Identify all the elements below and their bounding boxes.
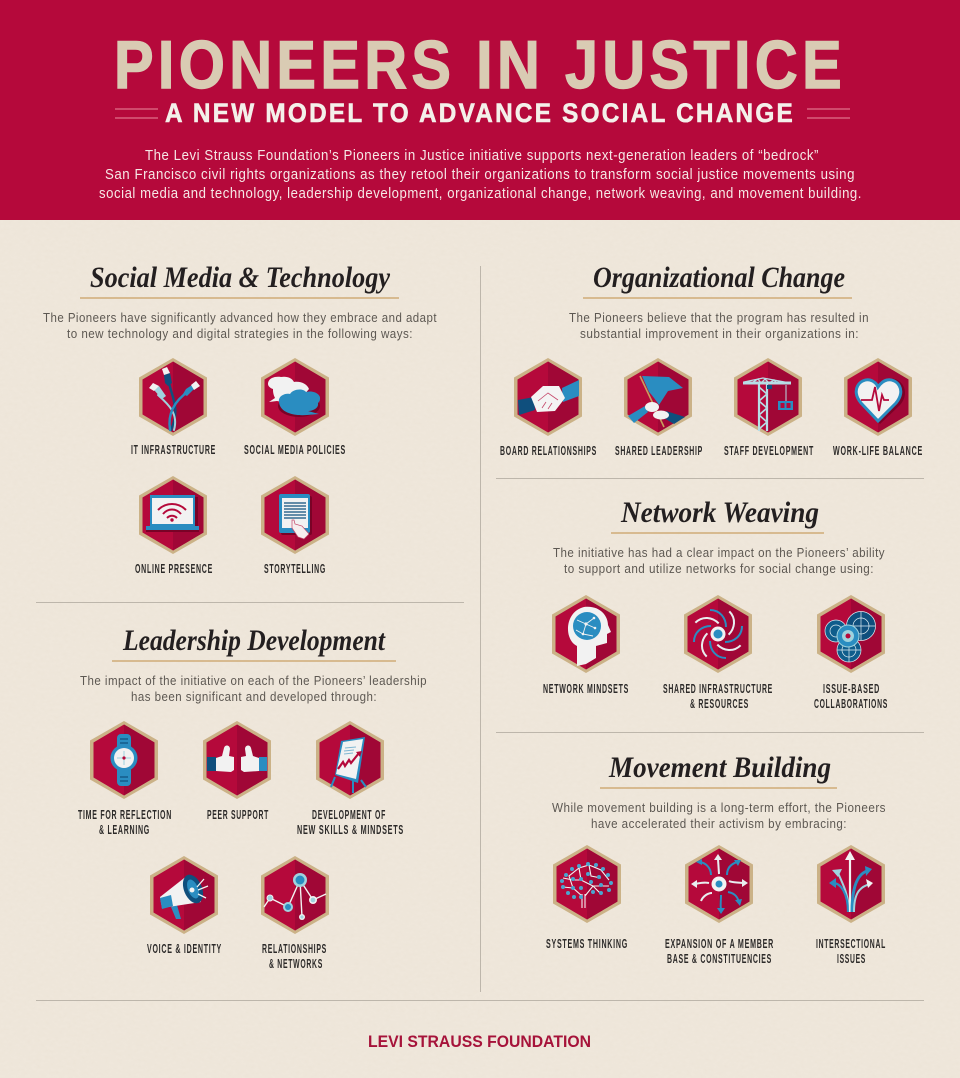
label: shared infrastructure and resources [663, 682, 773, 711]
label: staff development: STAFF DEVELOPMENT [724, 444, 814, 458]
icon: swirl of arrows [684, 595, 752, 673]
label: intersectional issues [816, 937, 886, 966]
label: relationships and networks: & NETWORKS [269, 957, 323, 971]
label: board relationships: BOARD RELATIONSHIPS [500, 444, 597, 458]
intro text: The Levi Strauss Foundation’s Pioneers in Justice initiative supports next-generation leaders of “bedrock” [145, 148, 819, 164]
description: While movement building is a long-term effort, the Pioneers [552, 801, 886, 815]
label: relationships and networks [262, 942, 327, 971]
label: shared leadership: SHARED LEADERSHIP [615, 444, 703, 458]
label: intersectional issues: INTERSECTIONAL [816, 937, 886, 951]
panel: leadership development [78, 624, 427, 971]
description [553, 546, 885, 576]
description: The Pioneers have significantly advanced how they embrace and adapt [43, 311, 437, 325]
label: social media policies: SOCIAL MEDIA POLICIES [244, 443, 346, 457]
label: time for reflection and learning: TIME FOR REFLECTION [78, 808, 172, 822]
description: The initiative has had a clear impact on the Pioneers’ ability [553, 546, 885, 560]
label: shared infrastructure and resources: SHARED INFRASTRUCTURE [663, 682, 773, 696]
icon: megaphone [150, 856, 218, 934]
description: substantial improvement in their organizations in: [580, 327, 859, 341]
panel: network weaving [543, 496, 888, 711]
icon: wristwatch [90, 721, 158, 799]
description [80, 674, 427, 704]
panel: social media and technology [43, 261, 437, 576]
icon: diverging arrows [817, 845, 885, 923]
label: expansion of a member base and constituencies [665, 937, 774, 966]
heading: leadership development: Leadership Development [122, 624, 386, 657]
icon: flip chart [316, 721, 384, 799]
icon: construction crane [734, 358, 802, 436]
description: have accelerated their activism by embracing: [591, 817, 847, 831]
intro text: San Francisco civil rights organizations as they retool their organizations to transform social justice movements using [105, 167, 855, 183]
label: shared infrastructure and resources: & RESOURCES [690, 697, 749, 711]
label: network mindsets: NETWORK MINDSETS [543, 682, 629, 696]
label: development of new skills and mindsets: NEW SKILLS & MINDSETS [297, 823, 404, 837]
description [43, 311, 437, 341]
intro text [99, 148, 862, 202]
label: online presence: ONLINE PRESENCE [135, 562, 213, 576]
icon: thumbs up [203, 721, 271, 799]
description: The Pioneers believe that the program has resulted in [569, 311, 869, 325]
label: issue-based collaborations: COLLABORATIONS [814, 697, 888, 711]
icon: overlapping radars [817, 595, 885, 673]
icon: tablet with hand [261, 476, 329, 554]
label: time for reflection and learning [78, 808, 172, 837]
description: to new technology and digital strategies in the following ways: [67, 327, 413, 341]
label: voice and identity: VOICE & IDENTITY [147, 942, 222, 956]
label: expansion of a member base and constituencies: BASE & CONSTITUENCIES [667, 952, 772, 966]
heading: social media and technology: Social Media & Technology [90, 261, 391, 294]
heading: movement building: Movement Building [608, 751, 831, 784]
label: systems thinking: SYSTEMS THINKING [546, 937, 628, 951]
panel: organizational change [500, 261, 923, 458]
description: has been significant and developed through: [131, 690, 377, 704]
label: time for reflection and learning: & LEARNING [99, 823, 150, 837]
icon: network nodes [261, 856, 329, 934]
icon: speech bubbles [261, 358, 329, 436]
paper background [0, 220, 960, 1078]
footer logotype: LEVI STRAUSS FOUNDATION [368, 1033, 591, 1051]
icon: cables [139, 358, 207, 436]
header band [0, 0, 960, 220]
icon: expanding arrows [685, 845, 753, 923]
icon: head with network [552, 595, 620, 673]
description [552, 801, 886, 831]
label: development of new skills and mindsets: DEVELOPMENT OF [312, 808, 386, 822]
heading: organizational change: Organizational Change [593, 261, 845, 294]
subtitle: A NEW MODEL TO ADVANCE SOCIAL CHANGE [165, 98, 795, 128]
label: intersectional issues: ISSUES [837, 952, 866, 966]
label: issue-based collaborations: ISSUE-BASED [823, 682, 880, 696]
title: PIONEERS IN JUSTICE [114, 27, 846, 103]
description: The impact of the initiative on each of the Pioneers’ leadership [80, 674, 427, 688]
label: storytelling: STORYTELLING [264, 562, 326, 576]
description: to support and utilize networks for social change using: [564, 562, 874, 576]
icon: hands holding flag [624, 358, 692, 436]
description [569, 311, 869, 341]
panel: movement building [546, 751, 886, 966]
label: relationships and networks: RELATIONSHIPS [262, 942, 327, 956]
label: expansion of a member base and constituencies: EXPANSION OF A MEMBER [665, 937, 774, 951]
label: IT infrastructure: IT INFRASTRUCTURE [131, 443, 216, 457]
icon: handshake [514, 358, 582, 436]
intro text: social media and technology, leadership development, organizational change, network weaving, and movement building. [99, 186, 862, 202]
label: development of new skills and mindsets [297, 808, 404, 837]
label: peer support: PEER SUPPORT [207, 808, 269, 822]
subtitle rules [115, 109, 850, 118]
label: issue-based collaborations [814, 682, 888, 711]
icon: heart with pulse [844, 358, 912, 436]
icon: laptop with wifi [139, 476, 207, 554]
heading: network weaving: Network Weaving [620, 496, 819, 529]
icon: brain circuit [553, 845, 621, 923]
